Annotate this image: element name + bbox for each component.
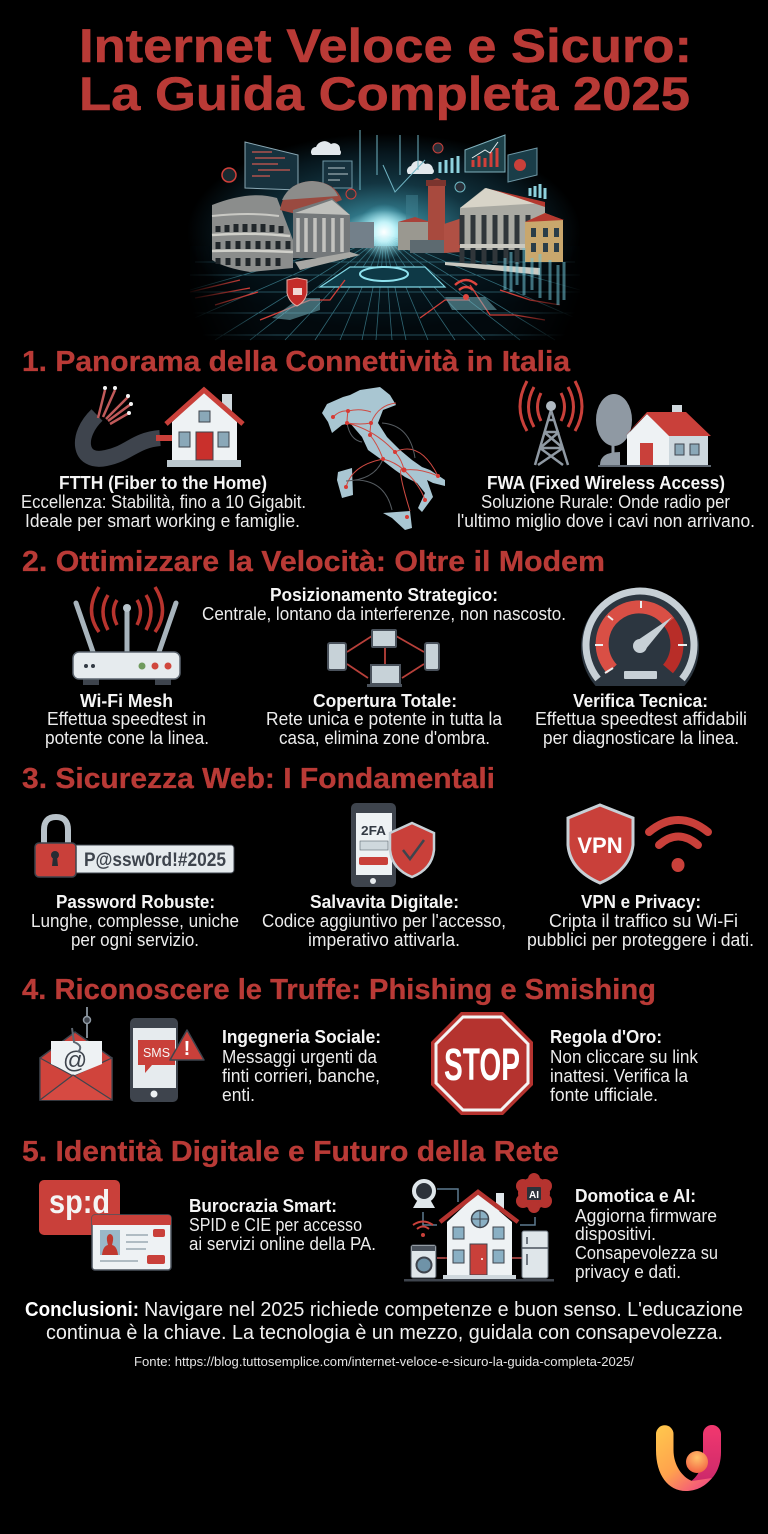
icon: SMS phone alert (130, 1018, 204, 1102)
text: FTTH: Ideale per smart working e famiglie. (25, 510, 300, 531)
text: Password Robuste (31, 891, 239, 950)
text: Wi-Fi Mesh: potente cone la linea. (45, 727, 209, 748)
text: VPN e Privacy: Cripta il traffico su Wi-Fi (549, 910, 738, 931)
glow core (356, 204, 412, 260)
panel: placement and coverage (202, 584, 566, 748)
conclusions: Navigare nel 2025 richiede competenze e buon senso. L'educazione (144, 1299, 743, 1321)
conclusions: continua è la chiave. La tecnologia è un mezzo, guidala con consapevolezza. (46, 1322, 723, 1344)
text: Wi-Fi Mesh: Effettua speedtest in (47, 708, 206, 729)
text: VPN e Privacy: VPN e Privacy: (581, 891, 701, 912)
text: VPN e Privacy (527, 891, 754, 950)
icon: phone with 2FA and shield (351, 803, 434, 887)
text: Password Robuste: Password Robuste: (56, 891, 215, 912)
heading: section 2: 2. Ottimizzare la Velocità: Oltre il Modem (22, 546, 605, 578)
panel: Verifica Tecnica (535, 591, 747, 748)
panel: Burocrazia Smart (39, 1180, 376, 1270)
text: Ingegneria Sociale: Messaggi urgenti da (222, 1046, 378, 1067)
icon: speedometer gauge (586, 591, 694, 681)
text: Domotica e AI: Domotica e AI: (575, 1185, 696, 1206)
icon: padlock and password field (35, 817, 234, 877)
text: Burocrazia Smart: Burocrazia Smart: (189, 1195, 337, 1216)
heading: section 3: 3. Sicurezza Web: I Fondamentali (22, 763, 495, 795)
panel: Salvavita Digitale (262, 803, 506, 950)
clouds (311, 141, 434, 174)
conclusions: Conclusioni: (25, 1299, 139, 1321)
icon: wifi signal (649, 820, 708, 872)
text: Regola d'Oro: fonte ufficiale. (550, 1084, 658, 1105)
right chart screens (360, 130, 545, 235)
icon: mesh network of devices (328, 630, 439, 687)
icon: stop sign: STOP (444, 1039, 520, 1090)
text: Verifica Tecnica: Effettua speedtest affidabili (535, 708, 747, 729)
icon: VPN shield (568, 805, 633, 883)
icon: smart home with appliances (404, 1173, 554, 1282)
text: FTTH: Eccellenza: Stabilità, fino a 10 Gigabit. (21, 491, 306, 512)
map: Italy network (322, 387, 445, 530)
text: Verifica Tecnica: Verifica Tecnica: (573, 690, 708, 711)
text: Ingegneria Sociale: Ingegneria Sociale: (222, 1026, 381, 1047)
text: FWA: FWA (Fixed Wireless Access) (487, 472, 725, 493)
icon: antenna and rural house (520, 381, 711, 466)
icon: phone with 2FA and shield: 2FA (361, 823, 387, 838)
title (79, 19, 692, 120)
text: Regola d'Oro (550, 1026, 699, 1105)
text: Posizionamento Strategico: Posizionamento Strategico: (270, 584, 498, 605)
text: FTTH (21, 472, 306, 531)
text: Regola d'Oro: inattesi. Verifica la (550, 1065, 689, 1086)
wifi icon (445, 280, 497, 310)
text: FWA: l'ultimo miglio dove i cavi non arrivano. (457, 510, 755, 531)
heading: section 5: 5. Identità Digitale e Futuro della Rete (22, 1136, 559, 1168)
text: Domotica e AI: Consapevolezza su (575, 1242, 718, 1263)
text: Salvavita Digitale: imperativo attivarla. (308, 929, 460, 950)
icon: padlock and password field: P@ssw0rd!#2025 (84, 850, 226, 871)
text: FWA: Soluzione Rurale: Onde radio per (481, 491, 730, 512)
icon: phishing envelope with hook: @ (63, 1047, 87, 1074)
text: Ingegneria Sociale: enti. (222, 1084, 255, 1105)
text: Posizionamento Strategico (202, 584, 566, 624)
panel: VPN e Privacy (527, 805, 754, 950)
icon: stop sign (431, 1012, 533, 1115)
text: Posizionamento Strategico: Centrale, lontano da interferenze, non nascosto. (202, 603, 566, 624)
text: Password Robuste: Lunghe, complesse, uniche (31, 910, 239, 931)
title: La Guida Completa 2025 (79, 67, 690, 120)
text: Copertura Totale: Copertura Totale: (313, 690, 457, 711)
hero illustration: Italian city and digital network (185, 130, 585, 340)
text: Burocrazia Smart (189, 1195, 376, 1254)
panel: FWA (457, 381, 755, 531)
text: Domotica e AI: dispositivi. (575, 1223, 656, 1244)
panel: Domotica e AI (404, 1173, 718, 1282)
icon: SMS phone alert: ! (184, 1038, 190, 1060)
text: Wi-Fi Mesh (45, 690, 209, 748)
Pantheon (280, 181, 374, 270)
text: Domotica e AI: Aggiorna firmware (575, 1205, 717, 1226)
text: Ingegneria Sociale (222, 1026, 381, 1105)
logo (656, 1425, 721, 1491)
text: Verifica Tecnica (535, 690, 747, 748)
icon: router (73, 587, 180, 685)
text: Salvavita Digitale: Salvavita Digitale: (310, 891, 459, 912)
text: Domotica e AI (575, 1185, 718, 1282)
text: Verifica Tecnica: per diagnosticare la linea. (543, 727, 739, 748)
text: Copertura Totale (266, 690, 503, 748)
shield icon (272, 278, 320, 320)
conclusions (25, 1299, 743, 1344)
text: Copertura Totale: Rete unica e potente in tutta la (266, 708, 503, 729)
text: Copertura Totale: casa, elimina zone d'ombra. (279, 727, 490, 748)
text: Ingegneria Sociale: finti corrieri, banche, (222, 1065, 380, 1086)
palazzo (445, 188, 545, 275)
text: Password Robuste: per ogni servizio. (71, 929, 199, 950)
text: Salvavita Digitale (262, 891, 506, 950)
data bars (505, 248, 564, 305)
Colosseum (212, 195, 293, 272)
icon: fiber cable to house (83, 386, 243, 467)
title: Internet Veloce e Sicuro: (79, 19, 692, 72)
heading: section 4: 4. Riconoscere le Truffe: Phishing e Smishing (22, 974, 656, 1006)
panel: Password Robuste (31, 817, 239, 950)
text: Salvavita Digitale: Codice aggiuntivo per l'accesso, (262, 910, 506, 931)
text: VPN e Privacy: pubblici per proteggere i dati. (527, 929, 754, 950)
text: Regola d'Oro: Regola d'Oro: (550, 1026, 662, 1047)
text: FTTH: FTTH (Fiber to the Home) (59, 472, 267, 493)
text: Burocrazia Smart: ai servizi online della PA. (189, 1233, 376, 1254)
panel: Wi-Fi Mesh (45, 587, 209, 748)
icon: SMS phone alert: SMS (143, 1045, 170, 1060)
text: Domotica e AI: privacy e dati. (575, 1261, 681, 1282)
yellow house (525, 213, 564, 262)
icon: smart home with appliances: AI (529, 1190, 539, 1201)
text: Wi-Fi Mesh: Wi-Fi Mesh (80, 690, 173, 711)
central right buildings (398, 178, 462, 253)
left code screen (222, 142, 356, 199)
text: Burocrazia Smart: SPID e CIE per accesso (189, 1214, 362, 1235)
panel: Regola d'Oro (431, 1012, 699, 1115)
panel: FTTH (21, 386, 306, 531)
heading: section 1: 1. Panorama della Connettività in Italia (22, 346, 571, 378)
icon: SPID badge and ID card: sp:d (49, 1183, 110, 1220)
source: Fonte: https://blog.tuttosemplice.com/internet-veloce-e-sicuro-la-guida-completa-2025/ (134, 1354, 634, 1369)
circuit floor (190, 235, 580, 340)
icon: SPID badge and ID card (39, 1180, 171, 1270)
text: FWA (457, 472, 755, 531)
icon: VPN shield: VPN (577, 833, 623, 858)
icon: phishing envelope with hook (40, 1007, 112, 1100)
text: Regola d'Oro: Non cliccare su link (550, 1046, 699, 1067)
panel: Ingegneria Sociale (40, 1007, 381, 1105)
